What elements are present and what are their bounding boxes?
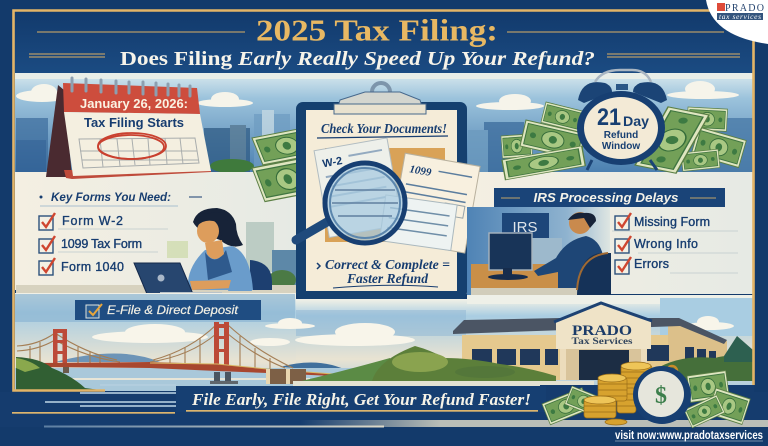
- header band: [14, 11, 754, 73]
- calendar rings: [72, 78, 190, 96]
- clouds: [16, 81, 739, 110]
- clipboard: [296, 83, 480, 299]
- logo badge: tax services: [719, 12, 761, 21]
- left bank trees: [16, 357, 100, 390]
- IRS office scene: [467, 207, 611, 295]
- delay: errors: Errors: [634, 257, 669, 271]
- clock text: Window: [602, 141, 640, 152]
- prado office building: [293, 302, 753, 386]
- IRS delays banner: IRS Processing Delays: [534, 191, 679, 205]
- golden gate bridge: [16, 322, 400, 390]
- coins money stopwatch: $: [655, 383, 667, 409]
- clock text: Day: [623, 114, 650, 129]
- stopwatch: [667, 366, 677, 376]
- calendar: [46, 78, 211, 179]
- distant hills: [55, 354, 160, 362]
- W-2 form: [314, 138, 402, 237]
- IRS delays banner: [494, 188, 725, 207]
- checklist: 1099: [39, 236, 142, 253]
- delays checklist: [612, 213, 738, 274]
- e-file banner: [75, 300, 261, 320]
- left cream panel: [15, 172, 300, 290]
- skyline left: [16, 110, 290, 172]
- lower landscape: [15, 293, 753, 391]
- calendar label: Tax Filing Starts: [84, 116, 184, 130]
- skyline right: [468, 118, 753, 172]
- ground strip: [293, 381, 594, 386]
- woman at laptop: [16, 208, 300, 295]
- bush: [210, 159, 254, 173]
- clipboard clip: [334, 83, 426, 114]
- clock text: 21: [597, 104, 621, 131]
- upper sky scene: [15, 73, 753, 173]
- entrance: [565, 349, 641, 380]
- title: [29, 12, 740, 70]
- IRS office scene: IRS: [512, 219, 538, 236]
- right cream panel: [466, 172, 753, 294]
- key forms block: Key Forms You Need:: [51, 190, 171, 204]
- building sign: PRADO: [572, 323, 632, 339]
- footer band: [0, 385, 768, 428]
- delay: missing form: Missing Form: [634, 215, 710, 229]
- logo badge: PRADO: [725, 3, 764, 14]
- delay: wrong info: Wrong Info: [634, 237, 698, 251]
- circled date: [98, 133, 166, 159]
- 1099 form: 1099: [408, 163, 433, 179]
- alarm clock: [577, 70, 667, 170]
- clipboard conclusion: [317, 257, 450, 288]
- footer slogan banner: File Early, File Right, Get Your Refund Faster!: [191, 390, 531, 409]
- clipboard conclusion: Faster Refund: [346, 271, 428, 286]
- prado office building: Tax Services: [572, 336, 633, 346]
- footer slogan banner: [176, 386, 546, 412]
- e-file banner: E-File & Direct Deposit: [107, 305, 239, 317]
- magnifying glass: [296, 163, 405, 243]
- title: 2025 Tax Filing:: [256, 12, 498, 48]
- right bank: [293, 358, 400, 383]
- checklist: 1099: 1099 Tax Form: [61, 237, 142, 251]
- checklist: form w-2: Form W-2: [62, 214, 123, 228]
- lower clouds: [92, 316, 734, 346]
- coins money stopwatch: [542, 362, 750, 428]
- clipboard conclusion: Correct & Complete =: [325, 257, 450, 272]
- checklist: form w-2: [39, 213, 123, 230]
- calendar grid: [79, 138, 199, 168]
- 1099 form: [390, 153, 480, 253]
- folder: [325, 148, 445, 242]
- W-2 form: W-2: [322, 155, 343, 170]
- money pile: [501, 102, 746, 180]
- title: Does Filing Early Really Speed Up Your Refund?: [120, 48, 595, 70]
- water stripes: [45, 385, 176, 406]
- clipboard heading: Check Your Documents!: [321, 122, 447, 137]
- checklist: 1040: [39, 258, 124, 275]
- clock text: [597, 104, 650, 152]
- key forms block: [39, 190, 202, 275]
- logo badge: [706, 0, 768, 44]
- coin stacks: [584, 362, 652, 425]
- shrubs: [372, 336, 753, 381]
- clock text: Refund: [604, 130, 638, 141]
- money left of clipboard: [252, 127, 324, 202]
- lower form: [379, 195, 457, 251]
- calendar date: January 26, 2026:: [80, 97, 188, 111]
- checklist: 1040: Form 1040: [61, 260, 124, 274]
